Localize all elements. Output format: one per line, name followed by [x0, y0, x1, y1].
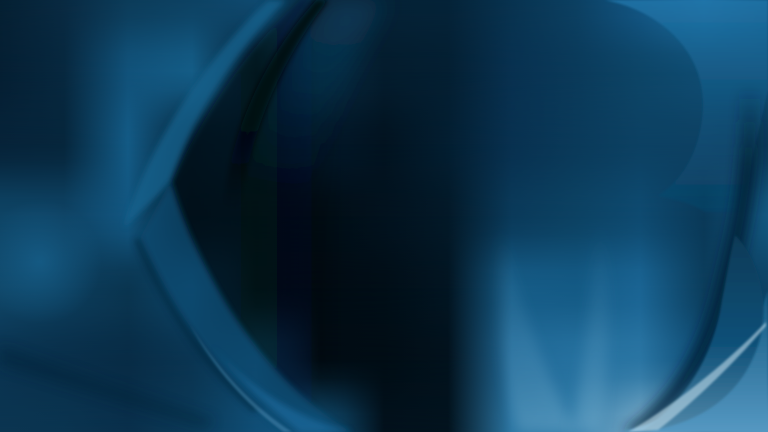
black crease — [224, 0, 328, 210]
bright lower strip edge — [205, 335, 352, 432]
bright area around upper lobe of letter B — [605, 0, 768, 212]
lit curved panel inside void — [240, 0, 385, 220]
dark crease below fold — [134, 238, 262, 412]
corner light — [620, 290, 768, 432]
dark curved streak — [622, 85, 760, 432]
upper fold strip — [124, 0, 286, 228]
dark band lower left — [0, 345, 215, 428]
dark central void — [172, 0, 345, 432]
thin light line on fold — [190, 325, 292, 432]
soft right light beams — [499, 220, 575, 432]
lower fold strip — [140, 182, 352, 432]
left glow — [0, 200, 102, 324]
white-blue swoosh — [628, 322, 766, 432]
lower lobe of letter B — [640, 235, 763, 432]
